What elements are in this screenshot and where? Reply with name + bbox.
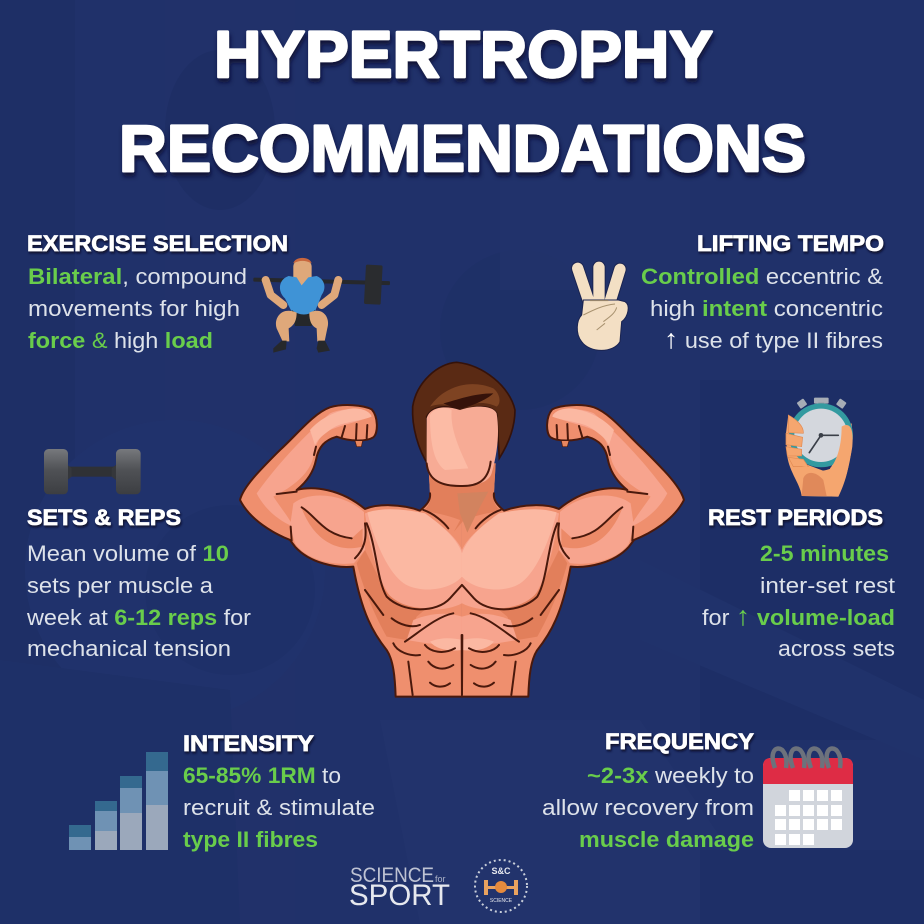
text: rest periods: 2-5 minutes — [760, 541, 889, 566]
text: sets and reps: sets per muscle a — [27, 573, 214, 598]
text: exercise selection: force & high load — [28, 328, 213, 353]
text: rest periods — [702, 541, 895, 661]
face — [427, 407, 498, 486]
text: lifting tempo: ↑ use of type II fibres — [664, 324, 883, 354]
text: intensity — [183, 763, 375, 852]
text: rest periods: across sets — [778, 636, 895, 661]
title: RECOMMENDATIONS — [119, 111, 806, 185]
text: intensity: 65-85% 1RM to — [183, 763, 341, 788]
heading: frequency: FREQUENCY — [605, 729, 754, 754]
text: frequency — [542, 763, 754, 852]
neck shadow — [457, 492, 488, 533]
text: frequency: muscle damage — [579, 827, 754, 852]
title: HYPERTROPHY — [214, 17, 713, 91]
logo: strength and conditioning science — [475, 860, 527, 912]
icon: squatting lifter with barbell — [253, 258, 390, 353]
text: intensity: type II fibres — [183, 827, 318, 852]
torso and left arm — [240, 405, 470, 697]
text: lifting tempo — [641, 264, 883, 354]
text: frequency: allow recovery from — [542, 795, 754, 820]
panel: intensity — [183, 731, 375, 852]
panel: exercise selection — [27, 231, 288, 353]
icon: dumbbell — [44, 449, 141, 494]
text: rest periods: for ↑ volume-load — [702, 601, 895, 631]
text: frequency: ~2-3x weekly to — [587, 763, 754, 788]
logo: science for sport: SPORT — [349, 879, 450, 912]
text: exercise selection: Bilateral , compound — [28, 264, 247, 289]
logo: strength and conditioning science: SCIENCE — [490, 898, 513, 904]
panel: sets and reps — [26, 505, 251, 661]
icon: hand showing three fingers — [577, 267, 628, 350]
torso and right arm — [454, 405, 684, 697]
text: exercise selection — [28, 264, 247, 353]
central muscular figure — [240, 362, 684, 697]
text: lifting tempo: high intent concentric — [650, 296, 883, 321]
icon: ascending bar chart — [69, 752, 168, 850]
text: rest periods: inter-set rest — [760, 573, 895, 598]
text: sets and reps — [26, 541, 251, 661]
logo: science for sport: for — [435, 874, 446, 884]
logo: science for sport: SCIENCE — [350, 864, 434, 887]
title — [119, 17, 806, 185]
heading: lifting tempo: LIFTING TEMPO — [697, 231, 884, 256]
text: intensity: recruit & stimulate — [183, 795, 375, 820]
text: lifting tempo: Controlled eccentric & — [641, 264, 883, 289]
heading: rest periods: REST PERIODS — [708, 505, 883, 530]
logo: science for sport — [349, 864, 450, 912]
heading: sets and reps: SETS & REPS — [27, 505, 181, 530]
logo: strength and conditioning science: S&C — [491, 866, 511, 876]
text: exercise selection: movements for high — [28, 296, 240, 321]
text: sets and reps: week at 6-12 reps for — [26, 605, 251, 630]
icon: calendar — [763, 748, 853, 848]
icon: hair — [413, 362, 515, 465]
heading: intensity: INTENSITY — [183, 731, 314, 756]
text: sets and reps: mechanical tension — [27, 636, 231, 661]
text: sets and reps: Mean volume of 10 — [27, 541, 229, 566]
heading: exercise selection: EXERCISE SELECTION — [27, 231, 288, 256]
panel: lifting tempo — [641, 231, 884, 354]
panel: frequency — [542, 729, 754, 852]
icon: stopwatch in hand — [786, 398, 853, 497]
panel: rest periods — [702, 505, 895, 661]
